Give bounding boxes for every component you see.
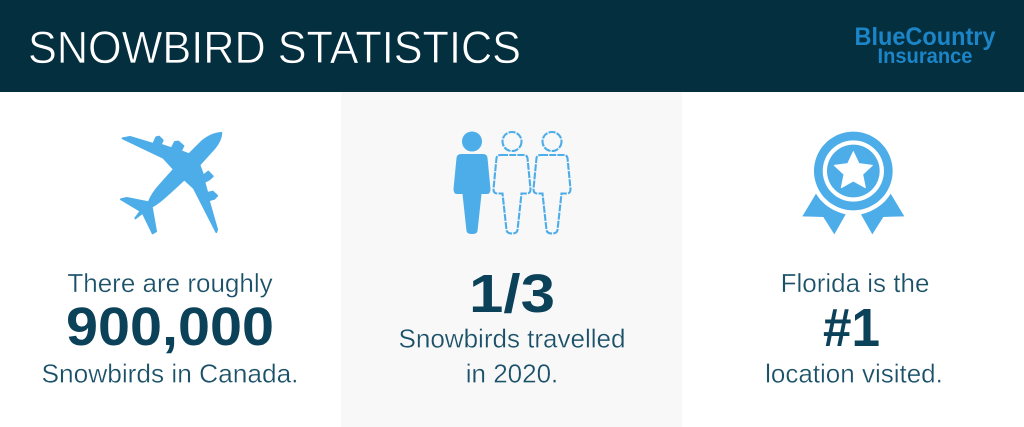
text: roughly: There are roughly <box>67 268 273 298</box>
logo: Insurance <box>878 45 972 68</box>
title: SNOWBIRD STATISTICS <box>28 22 521 73</box>
header bar <box>0 0 1024 92</box>
stat: 1/3: 1/3 <box>469 264 555 324</box>
text: in 2020: in 2020. <box>466 358 558 388</box>
text: snowbirds travelled: Snowbirds travelled <box>399 324 625 354</box>
stat: 900,000: 900,000 <box>66 297 274 357</box>
text: location visited: location visited. <box>765 358 943 388</box>
logo <box>854 23 996 68</box>
icon: dashed people <box>494 132 570 234</box>
text: florida: Florida is the <box>781 268 929 298</box>
stat: #1: #1 <box>823 298 880 358</box>
logo: BlueCountry <box>854 23 996 51</box>
icon: solid person <box>454 132 490 234</box>
panel: canada <box>42 133 298 388</box>
text: snowbirds in canada: Snowbirds in Canada. <box>42 358 298 388</box>
panel: middle background <box>341 92 682 427</box>
icon: airplane <box>121 133 221 233</box>
icon: award ribbon <box>802 132 904 234</box>
panel: travelled <box>399 132 625 388</box>
panel: florida <box>765 132 943 389</box>
